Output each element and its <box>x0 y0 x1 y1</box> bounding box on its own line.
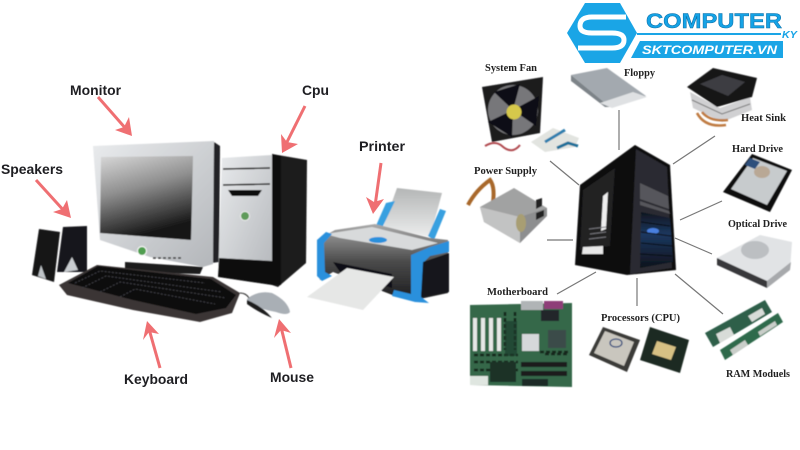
arrow: speakers <box>36 180 71 218</box>
arrow: mouse <box>274 319 291 368</box>
icon: mouse <box>240 292 290 318</box>
connector lines <box>547 110 723 314</box>
label: Monitor: Monitor <box>70 82 122 98</box>
wordmark: KY: KY <box>782 30 798 41</box>
panel: desktop computer set <box>1 82 449 387</box>
banner: website: SKTCOMPUTER.VN <box>642 43 777 57</box>
icon: processors <box>589 327 689 373</box>
icon: speakers <box>32 226 87 282</box>
icon: RAM modules <box>705 300 783 360</box>
label: Floppy: Floppy <box>624 68 656 79</box>
label: Hard Drive: Hard Drive <box>732 144 783 155</box>
label: System Fan: System Fan <box>485 63 537 74</box>
label: Heat Sink: Heat Sink <box>741 113 786 124</box>
label: RAM Moduels: RAM Moduels <box>726 369 790 380</box>
icon: floppy drive <box>571 68 647 108</box>
label: Printer: Printer <box>359 138 406 154</box>
arrow: keyboard <box>143 321 160 368</box>
label: Processors (CPU): Processors (CPU) <box>601 313 680 324</box>
icon: printer <box>307 188 449 310</box>
banner: website <box>631 41 783 58</box>
arrow: monitor <box>98 97 132 136</box>
icon: heat sink <box>687 68 757 126</box>
arrow: cpu <box>281 106 305 153</box>
label: Mouse: Mouse <box>270 369 314 385</box>
icon: motherboard <box>470 301 572 387</box>
icon: keyboard <box>59 265 240 322</box>
icon: system unit <box>218 154 307 287</box>
icon: system fan <box>482 77 579 152</box>
label: Power Supply: Power Supply <box>474 166 538 177</box>
icon: optical drive <box>717 235 792 288</box>
icon: power supply <box>468 180 547 243</box>
wordmark: COMPUTER: COMPUTER <box>646 10 782 33</box>
label: Motherboard: Motherboard <box>487 287 548 298</box>
icon: monitor <box>93 141 220 274</box>
label: Speakers: Speakers <box>1 161 63 177</box>
label: Optical Drive: Optical Drive <box>728 219 787 230</box>
icon: tower case <box>575 145 676 275</box>
icon: hard drive <box>723 154 792 212</box>
label: Keyboard: Keyboard <box>124 371 188 387</box>
icon: hexagon S mark <box>567 3 637 63</box>
logo: SKT Computer <box>567 3 798 63</box>
panel: computer components <box>468 63 792 387</box>
arrow: printer <box>366 163 384 214</box>
label: Cpu: Cpu <box>302 82 329 98</box>
